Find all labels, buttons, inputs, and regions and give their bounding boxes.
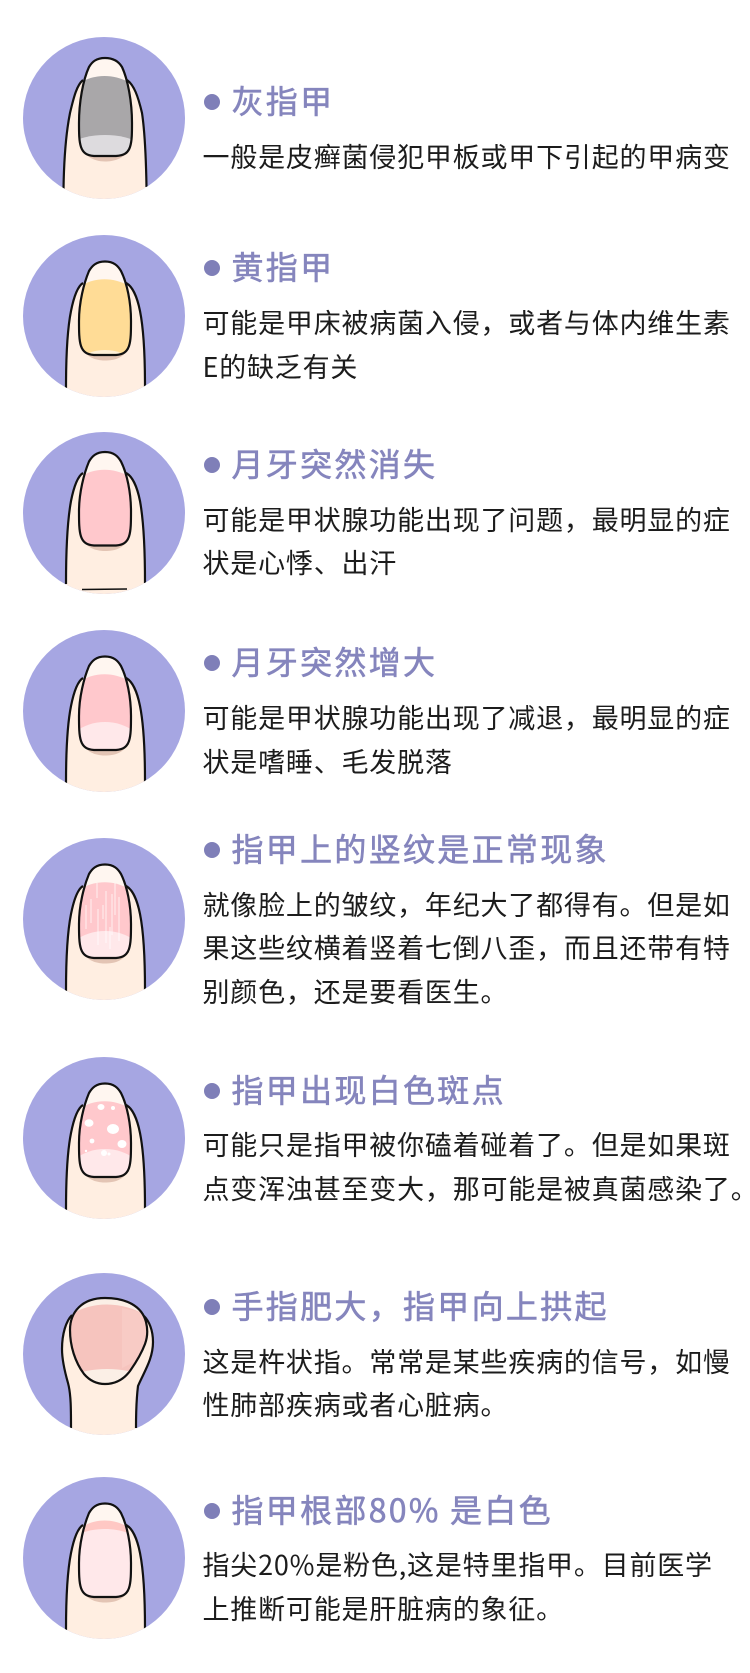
- text block: 一般是皮癣菌侵犯甲板或甲下引起的甲病变: [202, 136, 731, 175]
- text block: 这是杵状指。常常是某些疾病的信号，如慢: [202, 1341, 731, 1380]
- bullet: [204, 94, 220, 110]
- bullet: [204, 1299, 220, 1315]
- icon: yellow nail finger: [23, 235, 185, 397]
- heading: 手指肥大，指甲向上拱起: [232, 1282, 609, 1328]
- text block: 指尖20%是粉色,这是特里指甲。目前医学: [202, 1544, 713, 1583]
- item: vertical ridges: [23, 825, 731, 1010]
- text block: 状是嗜睡、毛发脱落: [202, 741, 453, 780]
- text block: 果这些纹横着竖着七倒八歪，而且还带有特: [202, 927, 731, 966]
- bullet: [204, 260, 220, 276]
- text block: E的缺乏有关: [202, 346, 358, 385]
- icon: nail with large lunula: [23, 630, 185, 792]
- item: white spots: [23, 1057, 750, 1219]
- text block: 可能只是指甲被你磕着碰着了。但是如果斑: [202, 1124, 731, 1163]
- text block: 可能是甲床被病菌入侵，或者与体内维生素: [202, 302, 731, 341]
- icon: grey nail finger: [23, 37, 185, 199]
- heading: 指甲上的竖纹是正常现象: [232, 825, 609, 871]
- text block: 可能是甲状腺功能出现了问题，最明显的症: [202, 499, 731, 538]
- item: yellow nail: [23, 235, 731, 397]
- text block: 性肺部疾病或者心脏病。: [202, 1384, 508, 1423]
- text block: 点变浑浊甚至变大，那可能是被真菌感染了。: [202, 1168, 750, 1207]
- bullet: [204, 1503, 220, 1519]
- icon: white nail with pink tip: [23, 1477, 185, 1639]
- bullet: [204, 457, 220, 473]
- item: clubbed finger: [23, 1273, 729, 1435]
- heading: 月牙突然增大: [232, 638, 437, 684]
- bullet: [204, 655, 220, 671]
- icon: clubbed finger: [23, 1273, 185, 1435]
- bullet: [204, 842, 220, 858]
- heading: 指甲根部80% 是白色: [232, 1486, 553, 1532]
- item: lunula vanishes: [23, 432, 731, 594]
- text block: 可能是甲状腺功能出现了减退，最明显的症: [202, 697, 731, 736]
- item: grey nail: [23, 37, 731, 199]
- text block: 状是心悸、出汗: [202, 542, 397, 581]
- item: Terry's nails: [23, 1477, 710, 1639]
- icon: nail without lunula: [23, 432, 185, 594]
- item: lunula enlarges: [23, 630, 731, 792]
- heading: 灰指甲: [232, 77, 334, 123]
- heading: 月牙突然消失: [232, 440, 437, 486]
- heading: 黄指甲: [232, 243, 334, 289]
- heading: 指甲出现白色斑点: [232, 1066, 506, 1112]
- bullet: [204, 1083, 220, 1099]
- text block: 就像脸上的皱纹，年纪大了都得有。但是如: [202, 884, 731, 923]
- icon: nail with vertical ridges: [23, 838, 185, 1000]
- text block: 别颜色，还是要看医生。: [202, 971, 508, 1010]
- icon: nail with white spots: [23, 1057, 185, 1219]
- text block: 上推断可能是肝脏病的象征。: [202, 1588, 564, 1627]
